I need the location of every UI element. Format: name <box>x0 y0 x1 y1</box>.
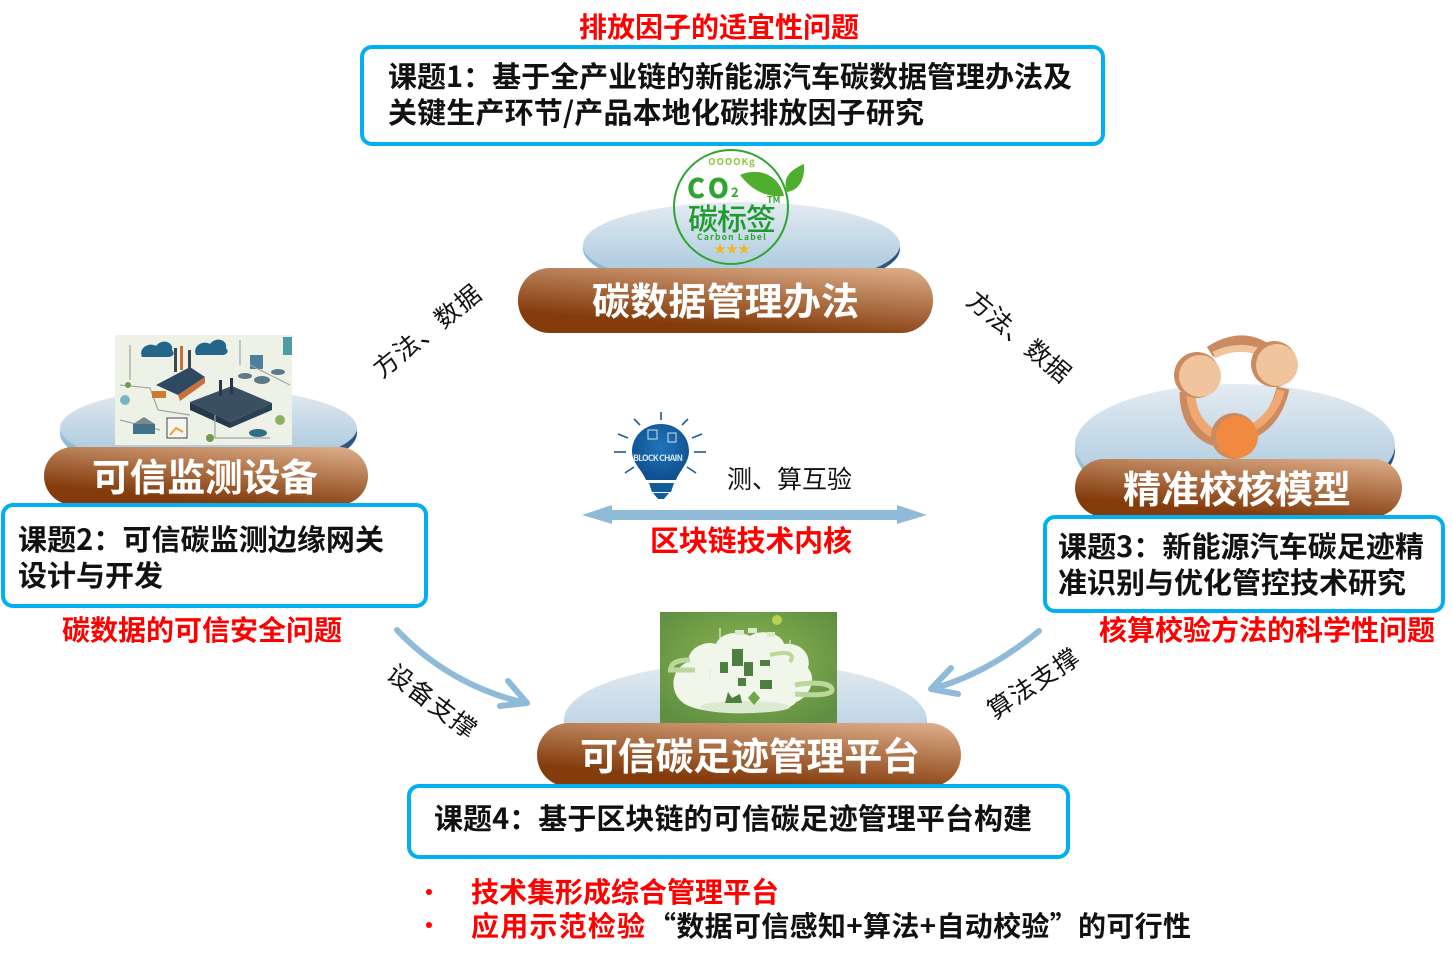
heading: emission factor question: 排放因子的适宜性问题 <box>579 6 859 46</box>
bullet list: outcomes: 技术集形成综合管理平台 <box>471 871 779 911</box>
panel: topic 3 box <box>1045 517 1443 611</box>
panel: topic 3 box: 准识别与优化管控技术研究 <box>1058 560 1406 602</box>
label: method and data right: 方法、数据 <box>960 282 1080 390</box>
panel: topic 1 box: 关键生产环节/产品本地化碳排放因子研究 <box>388 90 924 132</box>
label: device support: 设备支撑 <box>380 655 485 746</box>
panel: topic 3 box: 课题3：新能源汽车碳足迹精 <box>1058 524 1424 566</box>
label: measurement and calculation cross-check: 测、算互验 <box>727 460 852 496</box>
panel: accurate calibration model platform <box>1075 341 1402 517</box>
panel: carbon data management method platform: 碳数据管理办法 <box>592 271 859 326</box>
icon: carbon label badge <box>674 150 804 264</box>
panel: topic 2 box: 设计与开发 <box>18 553 163 595</box>
panel: topic 2 box <box>3 505 426 606</box>
icon: carbon label badge: Carbon Label <box>697 231 767 243</box>
panel: topic 1 box: 课题1：基于全产业链的新能源汽车碳数据管理办法及 <box>388 54 1072 96</box>
icon: carbon label badge: CO <box>687 167 729 206</box>
icon: blockchain light bulb <box>614 412 706 499</box>
panel: trusted monitoring device platform <box>44 335 368 505</box>
label: method and data left: 方法、数据 <box>364 275 488 385</box>
bullet list: outcomes <box>426 871 1191 945</box>
bullet list: outcomes: 应用示范检验 <box>471 905 645 945</box>
panel: accurate calibration model platform: 精准校核模型 <box>1123 459 1351 514</box>
panel: trusted carbon footprint platform: 可信碳足迹管理平台 <box>580 726 920 781</box>
icon: carbon label badge: OOOOKg <box>708 154 756 168</box>
icon: carbon label badge: 碳标签 <box>688 195 776 239</box>
panel: topic 4 box <box>409 786 1068 857</box>
panel: topic 4 box: 课题4：基于区块链的可信碳足迹管理平台构建 <box>434 796 1032 838</box>
panel: trusted monitoring device platform: 可信监测设备 <box>92 447 318 502</box>
icon: carbon label badge: TM <box>767 193 780 206</box>
icon: green city cloud illustration <box>660 612 837 723</box>
icon: carbon label badge: 2 <box>731 182 739 201</box>
caption: calculation verification question: 核算校验方法的科学性问题 <box>1099 609 1435 649</box>
arrow: device support curved arrow <box>397 630 527 706</box>
label: algorithm support: 算法支撑 <box>979 639 1086 727</box>
arrow: two-way blockchain arrow <box>582 505 927 524</box>
panel: topic 2 box: 课题2：可信碳监测边缘网关 <box>18 517 384 559</box>
caption: blockchain technology core: 区块链技术内核 <box>650 518 852 560</box>
caption: trusted data security question: 碳数据的可信安全问题 <box>62 609 342 649</box>
panel: topic 1 box <box>362 47 1103 144</box>
panel: trusted carbon footprint platform <box>537 612 961 787</box>
icon: industrial IoT illustration <box>115 335 292 445</box>
icon: blockchain light bulb: BLOCK CHAIN <box>633 452 683 464</box>
arrow: algorithm support curved arrow <box>931 631 1039 694</box>
panel: carbon data management method platform <box>518 150 933 333</box>
icon: three connected nodes <box>1174 341 1298 459</box>
bullet list: outcomes: “数据可信感知+算法+自动校验”的可行性 <box>648 905 1191 945</box>
icon: carbon label badge: ★★★ <box>714 240 750 257</box>
